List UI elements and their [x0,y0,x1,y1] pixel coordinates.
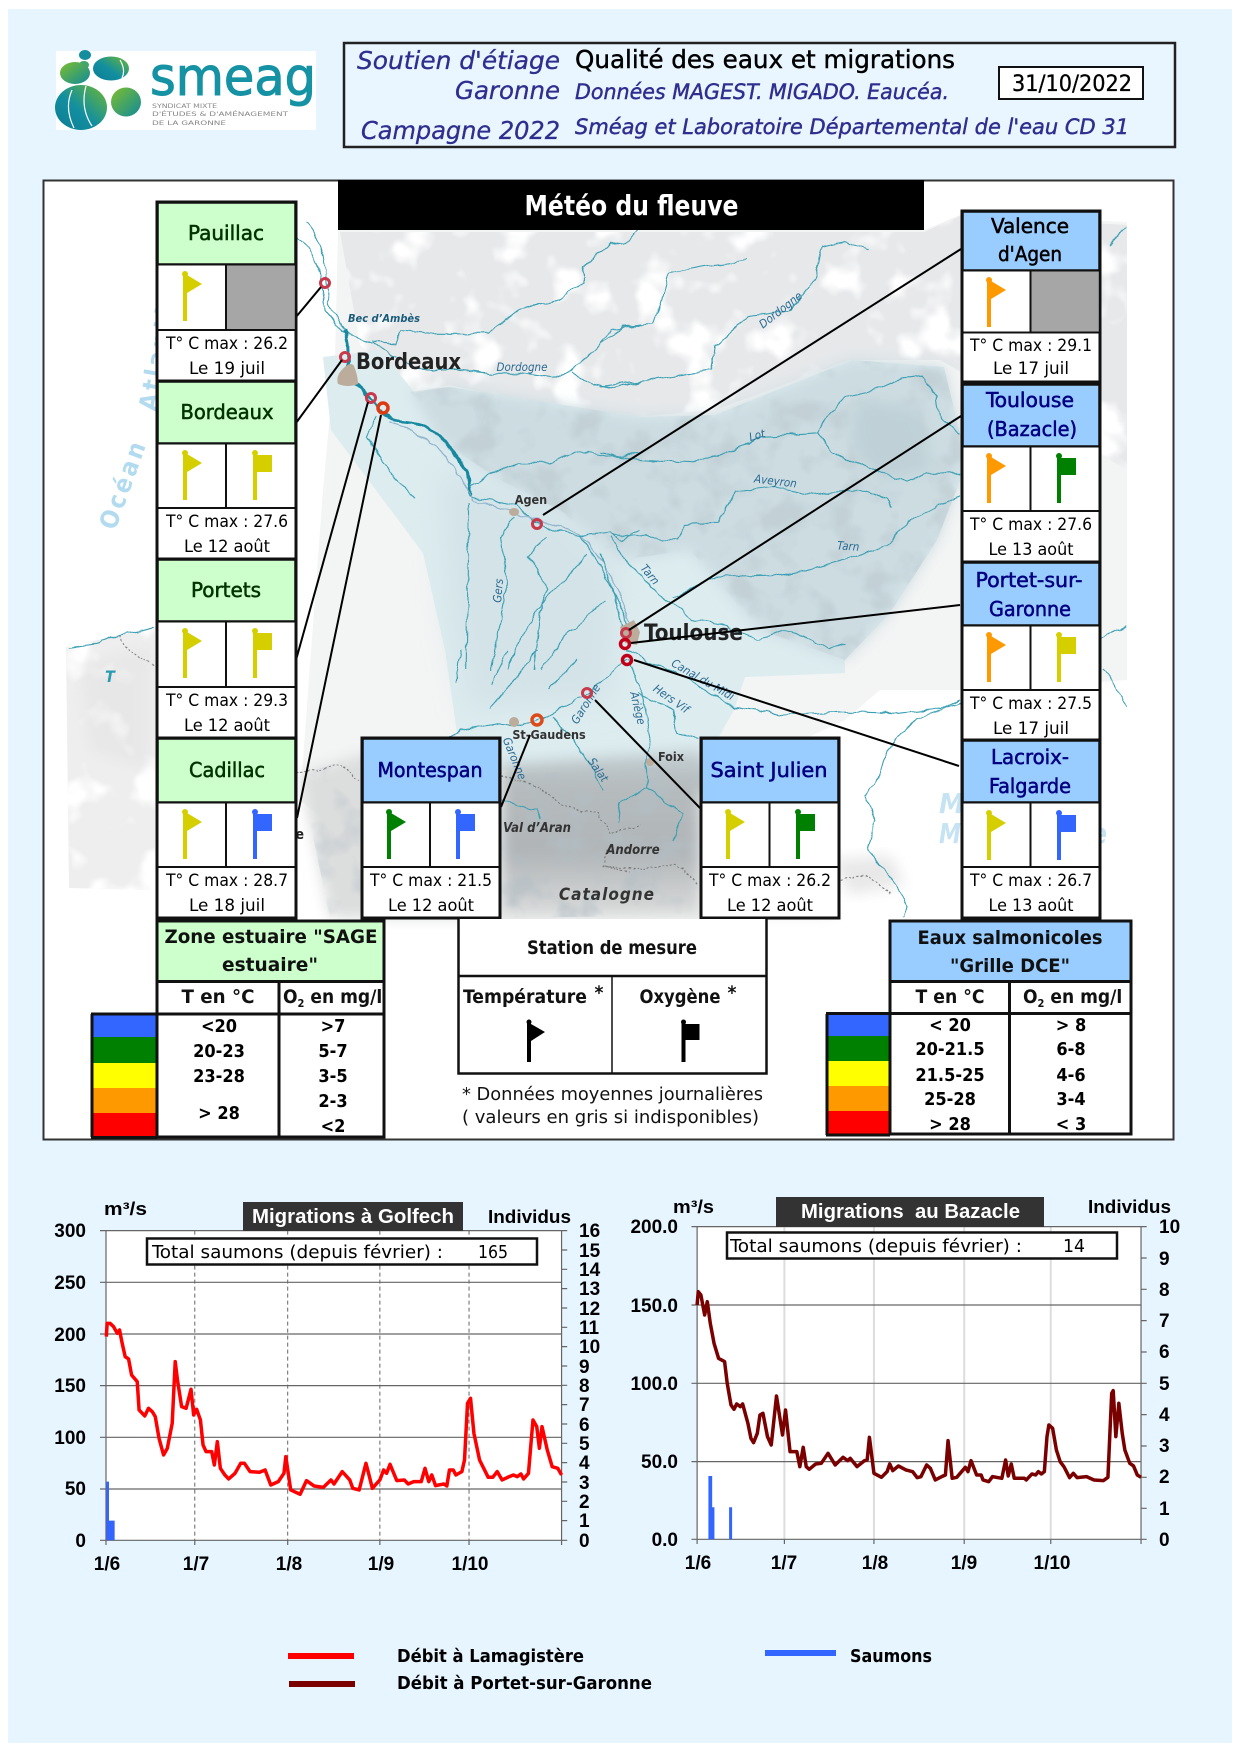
right axis labels: 6 [1159,1342,1170,1363]
footnote [462,1085,763,1128]
left axis labels: 50.0 [641,1452,678,1473]
station: Bordeaux [157,381,296,559]
legend: zone estuaire: >7 [321,1016,345,1037]
date axis labels: 1/8 [862,1553,888,1574]
rivers south-east part [604,650,1126,917]
legend: eaux salmonicoles: 6-8 [1056,1039,1086,1060]
date axis labels: 1/7 [183,1554,209,1575]
débit line Portet-sur-Garonne [697,1292,1141,1482]
station: Toulouse (Bazacle): Le 13 août [988,540,1074,560]
left axis labels: 0 [75,1531,86,1552]
series: Saumons [765,1646,932,1667]
station: Saint Julien: Saint Julien [710,758,828,782]
left axis labels: 0.0 [652,1530,678,1551]
map labels: Gers [490,577,506,603]
total saumons box: 165 [478,1242,508,1263]
station: Portets: Portets [191,578,261,602]
series: Débit à Lamagistère: Débit à Lamagistère [397,1646,584,1667]
date axis labels: 1/9 [951,1553,977,1574]
station: Valence d'Agen: T° C max : 29.1 [969,336,1092,356]
chart title: Migrations à Golfech [252,1206,454,1228]
logo: SMEAG: D'ÉTUDES & D'AMÉNAGEMENT [152,109,289,118]
rivers north part [69,222,640,670]
right axis labels: 5 [579,1434,590,1455]
right axis labels: 10 [1159,1217,1180,1238]
legend: zone estuaire: <2 [321,1116,345,1137]
right axis labels: 2 [579,1492,590,1513]
saumons bars [708,1476,732,1539]
legend: zone estuaire: en mg/l [304,986,382,1008]
footnote: ( valeurs en gris si indisponibles) [462,1108,759,1128]
right axis labels: 11 [579,1318,600,1339]
date axis labels: 1/8 [276,1554,302,1575]
right axis labels: 1 [1159,1499,1170,1520]
station: Saint Julien: Le 12 août [727,896,813,916]
legend: eaux salmonicoles: > 28 [929,1114,971,1135]
logo: SMEAG [55,47,316,130]
legend: zone estuaire: 23-28 [193,1066,245,1087]
right axis labels: 10 [579,1337,600,1358]
rivers [69,222,1126,917]
station: Lacroix-Falgarde: Le 13 août [988,896,1074,916]
right axis labels: 0 [1159,1530,1170,1551]
station: Lacroix-Falgarde [962,740,1100,918]
saumons bars [106,1482,115,1540]
legend: station de mesure: * [595,982,604,1004]
station: Pauillac [157,202,296,381]
date axis labels: 1/9 [368,1554,394,1575]
legend: eaux salmonicoles: 25-28 [924,1089,976,1110]
map labels: Bordeaux [356,350,461,375]
subtitle: data sources: Données MAGEST. MIGADO. Eaucéa. [575,80,949,104]
series: Débit à Portet-sur-Garonne: Débit à Portet-sur-Garonne [397,1673,652,1694]
station: Portet-sur-Garonne: Garonne [989,597,1071,621]
right axis labels: 3 [1159,1436,1170,1457]
left axis labels: 200.0 [630,1217,678,1238]
axis unit labels: m³/s [104,1199,147,1219]
map labels: Mer [939,787,995,820]
map labels: St-Gaudens [512,727,586,742]
map labels: Aveyron [752,471,798,491]
date box [999,67,1143,99]
icon: oxygen flag [681,1020,700,1062]
axis unit labels: Individus [488,1207,571,1227]
right axis labels: 8 [1159,1280,1170,1301]
date box: 31/10/2022 [1012,72,1132,97]
series: Débit à Portet-sur-Garonne [289,1673,652,1694]
logo: SMEAG: smeag [150,47,316,108]
map labels: Agen [515,492,547,507]
right axis labels: 7 [579,1395,590,1416]
total saumons box [147,1238,537,1264]
date axis labels: 1/10 [1034,1553,1070,1574]
legend: eaux salmonicoles: T en °C [916,986,984,1008]
legend: zone estuaire: > 28 [198,1103,240,1124]
map labels: Ariège [627,689,649,726]
Spain western relief [66,627,155,890]
logo: SMEAG: DE LA GARONNE [152,119,226,127]
footnote: * Données moyennes journalières [462,1085,763,1105]
map labels: Val d’Aran [503,821,571,836]
panel: météo du fleuve map frame [44,180,1180,1694]
title bar: Météo du fleuve [338,180,924,230]
map labels: Atlantique [133,248,190,413]
left axis labels [630,1217,678,1551]
chart: Migrations au Bazacle [630,1197,1180,1574]
plot area [697,1227,1141,1539]
débit line Lamagistère [106,1323,562,1494]
legend: eaux salmonicoles: Eaux salmonicoles [918,927,1102,949]
grid and axes [100,1231,567,1545]
legend: eaux salmonicoles: "Grille DCE" [950,955,1070,977]
legend: station de mesure: Station de mesure [527,937,697,959]
station: Cadillac: Le 18 juil [189,896,265,916]
left axis labels: 100.0 [630,1374,678,1395]
right axis labels [1159,1217,1180,1551]
date axis labels [685,1553,1070,1574]
legend: station de mesure: Oxygène [640,986,720,1008]
legend: eaux salmonicoles: < 20 [929,1015,971,1036]
right axis labels [579,1221,601,1552]
station: Montespan [362,738,500,918]
legend: zone estuaire: 5-7 [318,1041,348,1062]
map of the Garonne basin [66,215,1127,920]
subtitle: partners: Sméag et Laboratoire Départemental de l'eau CD 31 [575,115,1129,139]
axis unit labels [673,1197,1171,1217]
series: Saumons: Saumons [850,1646,932,1667]
total saumons box: 14 [1063,1236,1085,1257]
right axis labels: 9 [579,1357,590,1378]
heading: Soutien d'étiage Garonne Campagne 2022 [357,46,560,145]
legend: eaux salmonicoles: O [1023,986,1038,1008]
right axis labels: 9 [1159,1249,1170,1270]
map labels: Dordogne [497,360,547,374]
legend: eaux salmonicoles: en mg/l [1044,986,1122,1008]
right axis labels: 4 [579,1453,590,1474]
axis unit labels: m³/s [673,1197,714,1217]
map labels: Canal du Midi [669,656,737,703]
right axis labels: 15 [579,1241,601,1262]
legend: zone estuaire: 2-3 [318,1091,348,1112]
station: Valence d'Agen: d'Agen [998,242,1062,266]
station: Portets: T° C max : 29.3 [165,691,288,711]
left axis labels: 150 [54,1376,86,1397]
total saumons box: Total saumons (depuis février) : [729,1236,1022,1257]
legend: zone estuaire: Zone estuaire "SAGE [164,926,378,948]
axis unit labels [104,1199,571,1227]
header panel [344,43,1175,147]
station: Cadillac: T° C max : 28.7 [165,871,288,891]
plot area [106,1231,562,1540]
map labels: Océan [93,435,153,533]
right axis labels: 13 [579,1279,600,1300]
total saumons box: Total saumons (depuis février) : [151,1242,443,1263]
legend: eaux salmonicoles: < 3 [1056,1114,1086,1135]
map labels: Méditerranée [939,817,1107,850]
map labels: Andorre [605,843,660,858]
monitoring point markers [320,278,632,725]
legend: station de mesure [458,919,766,1074]
station: Saint Julien [701,738,839,918]
station: Valence d'Agen: Valence [991,214,1069,238]
logo: SMEAG: SYNDICAT MIXTE [152,102,217,110]
rivers south part [296,650,640,872]
station: Bordeaux: T° C max : 27.6 [165,512,288,532]
map labels: Salat [585,755,612,785]
map labels: Dordogne [756,289,805,331]
right axis labels: 0 [579,1531,590,1552]
station: Lacroix-Falgarde: Falgarde [989,774,1071,798]
legend: eaux salmonicoles [826,921,1131,1135]
station: Saint Julien: T° C max : 26.2 [708,871,831,891]
left axis labels: 250 [54,1273,86,1294]
left axis labels: 50 [65,1479,86,1500]
basin mid tint [440,470,620,710]
chart title: Migrations au Bazacle [801,1201,1020,1223]
station: Portets: Le 12 août [184,716,270,736]
basin light [323,350,967,770]
station: Cadillac: Cadillac [189,758,265,782]
title bar: Météo du fleuve: Météo du fleuve [524,189,738,222]
legend: zone estuaire: O [283,986,298,1008]
right axis labels: 16 [579,1221,600,1242]
legend: station de mesure: * [728,982,737,1004]
total saumons box [727,1232,1117,1258]
right axis labels: 4 [1159,1405,1170,1426]
station: Cadillac [157,738,296,918]
left axis labels: 150.0 [630,1296,678,1317]
map labels: Garonne [500,735,530,782]
rivers north-east part [600,227,1126,650]
chart: Migrations à Golfech [54,1199,601,1575]
map labels [93,248,1107,905]
station: Toulouse (Bazacle): Toulouse [985,388,1074,412]
grid and axes [691,1227,1147,1544]
station: Lacroix-Falgarde: T° C max : 26.7 [969,871,1092,891]
right axis labels: 6 [579,1415,590,1436]
legend: zone estuaire [91,921,384,1138]
legend: eaux salmonicoles: > 8 [1056,1015,1086,1036]
legend: zone estuaire: 3-5 [318,1066,348,1087]
map labels: Foix [658,749,685,764]
legend: zone estuaire: T en °C [182,986,254,1008]
map labels: Tarn [837,538,860,554]
legend: eaux salmonicoles: 2 [1038,997,1045,1010]
station: Valence d'Agen [962,211,1100,382]
station: Pauillac: T° C max : 26.2 [165,334,288,354]
left axis labels: 100 [54,1428,86,1449]
map labels: Tarn [638,561,663,587]
heading: Qualité des eaux et migrations: Qualité des eaux et migrations [575,45,955,74]
station: Valence d'Agen: Le 17 juil [993,359,1069,379]
left axis labels: 200 [54,1325,86,1346]
station: Pauillac: Pauillac [188,221,264,245]
right axis labels: 12 [579,1299,600,1320]
map labels: T [105,667,116,686]
right axis labels: 1 [579,1511,590,1532]
chart title [243,1202,463,1231]
station: Lacroix-Falgarde: Lacroix- [991,745,1069,769]
date axis labels: 1/6 [94,1554,120,1575]
station: Montespan: Montespan [378,758,482,782]
icon: temperature flag [526,1020,545,1062]
right axis labels: 8 [579,1376,590,1397]
basin dark [410,360,967,660]
right axis labels: 5 [1159,1374,1170,1395]
Pyrenees [500,750,720,918]
station: Pauillac: Le 19 juil [189,359,265,379]
left axis labels [54,1221,86,1552]
heading: Soutien d'étiage Garonne Campagne 2022: Campagne 2022 [361,116,560,145]
map relief and land [66,215,1127,920]
legend: chart series [288,1646,932,1694]
right axis labels: 7 [1159,1311,1170,1332]
station: Toulouse (Bazacle) [962,384,1100,562]
series: Débit à Lamagistère [288,1646,584,1667]
legend: eaux salmonicoles: 4-6 [1056,1065,1086,1086]
map labels: Toulouse [644,621,743,646]
legend: eaux salmonicoles: 3-4 [1056,1089,1086,1110]
station: Portet-sur-Garonne [962,562,1100,740]
heading: Soutien d'étiage Garonne Campagne 2022: Soutien d'étiage [357,46,560,75]
station: Montespan: Le 12 août [388,896,474,916]
heading: Soutien d'étiage Garonne Campagne 2022: Garonne [455,76,560,105]
station: Portet-sur-Garonne: Portet-sur- [976,568,1082,592]
map labels: Catalogne [559,885,655,905]
legend: zone estuaire: 20-23 [193,1041,245,1062]
legend: station de mesure: Température [463,986,587,1008]
map labels: Bec d’Ambès [348,312,420,325]
right axis labels: 3 [579,1473,590,1494]
date axis labels [94,1554,488,1575]
map labels: Pampelune [225,827,304,843]
legend: eaux salmonicoles: 21.5-25 [915,1065,985,1086]
date axis labels: 1/10 [452,1554,488,1575]
legend: eaux salmonicoles: 20-21.5 [915,1039,985,1060]
map labels: Garonne [568,681,603,726]
station: Portets [157,559,296,738]
station: Portet-sur-Garonne: Le 17 juil [993,719,1069,739]
right axis labels: 14 [579,1260,601,1281]
map labels: Lot [747,426,767,444]
towns [337,364,654,766]
map labels: Hers Vif [651,681,693,717]
legend: zone estuaire: 2 [298,997,305,1010]
station: Montespan: T° C max : 21.5 [369,871,492,891]
legend: zone estuaire: estuaire" [222,954,318,976]
legend: zone estuaire: <20 [201,1016,237,1037]
axis unit labels: Individus [1088,1197,1171,1217]
date axis labels: 1/7 [771,1553,797,1574]
left axis labels: 300 [54,1221,86,1242]
station: Bordeaux: Bordeaux [180,400,274,424]
leader lines [296,249,961,818]
chart title [776,1197,1044,1227]
station: Portet-sur-Garonne: T° C max : 27.5 [969,694,1092,714]
station: Bordeaux: Le 12 août [184,537,270,557]
station: Toulouse (Bazacle): T° C max : 27.6 [969,515,1092,535]
station: Toulouse (Bazacle): (Bazacle) [987,417,1077,441]
date axis labels: 1/6 [685,1553,711,1574]
right axis labels: 2 [1159,1467,1170,1488]
